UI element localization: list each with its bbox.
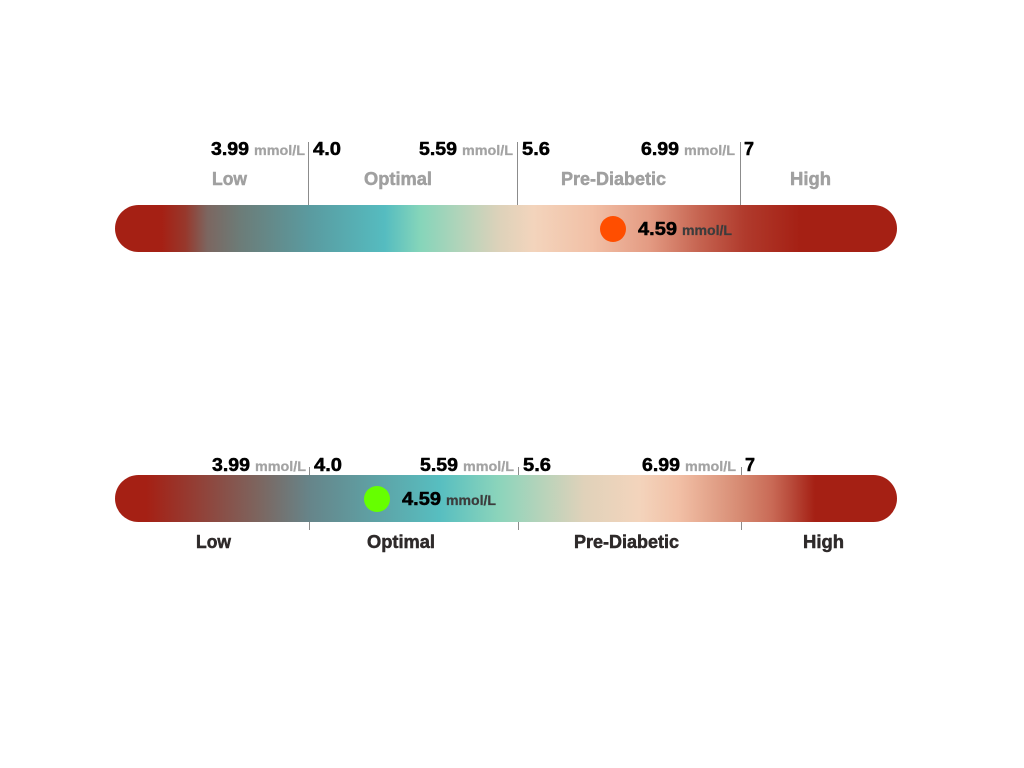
- gradient bar: [115, 475, 897, 522]
- threshold values: mmol/L: [685, 458, 736, 474]
- reading: 4.59: [402, 489, 441, 509]
- threshold values: 3.99: [211, 139, 249, 159]
- threshold values: [211, 139, 754, 159]
- range labels: [196, 532, 844, 552]
- threshold values: mmol/L: [463, 458, 514, 474]
- range labels: Low: [212, 169, 248, 189]
- threshold values: [212, 455, 755, 475]
- reading: [638, 219, 732, 239]
- threshold values: 4.0: [313, 139, 341, 159]
- reading: 4.59: [638, 219, 677, 239]
- range labels: Pre-Diabetic: [561, 169, 666, 189]
- panel: bottom gauge: [115, 455, 897, 552]
- threshold values: 7: [744, 139, 754, 159]
- threshold values: mmol/L: [254, 142, 305, 158]
- reading: mmol/L: [682, 222, 732, 238]
- marker dot: [600, 216, 626, 242]
- threshold dividers: [310, 467, 742, 530]
- reading: [402, 489, 496, 509]
- threshold dividers: [308, 142, 740, 205]
- range labels: Pre-Diabetic: [574, 532, 679, 552]
- threshold values: 6.99: [642, 455, 680, 475]
- panel: top gauge: [115, 139, 897, 252]
- threshold values: 7: [745, 455, 755, 475]
- reading: mmol/L: [446, 492, 496, 508]
- range labels: High: [790, 169, 831, 189]
- threshold values: 5.59: [419, 139, 457, 159]
- threshold values: 5.59: [420, 455, 458, 475]
- range labels: [212, 169, 831, 189]
- range labels: High: [803, 532, 844, 552]
- threshold values: 6.99: [641, 139, 679, 159]
- threshold values: 5.6: [523, 455, 551, 475]
- range labels: Optimal: [367, 532, 435, 552]
- threshold values: 5.6: [522, 139, 550, 159]
- threshold values: mmol/L: [255, 458, 306, 474]
- threshold values: mmol/L: [462, 142, 513, 158]
- threshold values: mmol/L: [684, 142, 735, 158]
- threshold values: 4.0: [314, 455, 342, 475]
- marker dot: [364, 486, 390, 512]
- gradient bar: [115, 205, 897, 252]
- threshold values: 3.99: [212, 455, 250, 475]
- range labels: Optimal: [364, 169, 432, 189]
- range labels: Low: [196, 532, 232, 552]
